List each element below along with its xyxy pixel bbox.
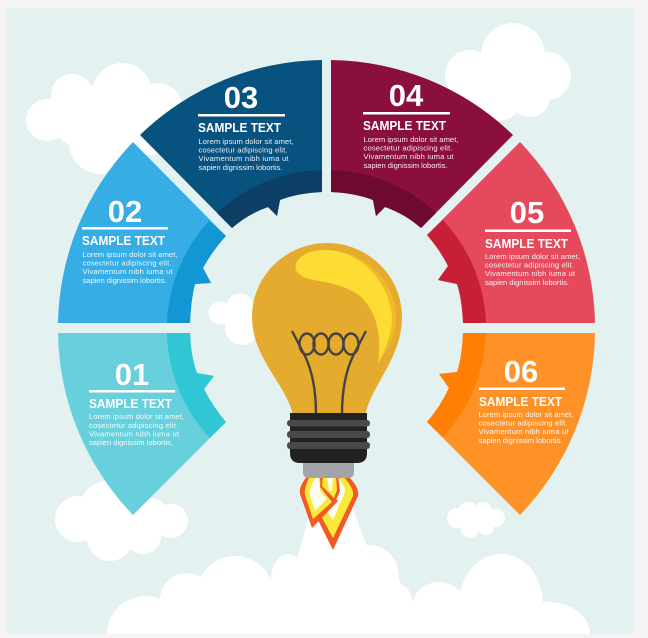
segment shape 04	[331, 60, 513, 228]
icon: rocket flames	[300, 476, 358, 550]
body text 03	[198, 137, 294, 172]
body text 01	[89, 412, 184, 447]
body text 03: sapien dignissim lobortis.	[198, 163, 282, 172]
inner band 04	[331, 170, 436, 228]
cloud: behind bulb	[208, 294, 262, 345]
cloud: bottom left	[55, 481, 188, 561]
number 05: 05	[510, 195, 544, 230]
inner band 03	[217, 170, 322, 228]
panel 01	[58, 333, 226, 515]
inner band 02	[167, 221, 226, 323]
body text 04: Vivamentum nibh iuma ut	[364, 152, 454, 161]
body text 06: Vivamentum nibh iuma ut	[478, 427, 569, 436]
inner band 06	[427, 333, 486, 437]
body text 01: Vivamentum nibh iuma ut	[89, 430, 180, 438]
segment shape 01	[58, 333, 226, 515]
body text 06	[478, 410, 574, 445]
body text 05: cosectetur adipiscing elit.	[485, 260, 574, 270]
heading 04: SAMPLE TEXT	[363, 118, 446, 133]
body text 04: cosectetur adipiscing elit.	[364, 144, 452, 152]
body text 02: sapien dignissim lobortis.	[82, 276, 166, 285]
body text 01: cosectetur adipiscing elit.	[89, 421, 178, 430]
screw base	[290, 413, 367, 463]
heading 03: SAMPLE TEXT	[198, 120, 281, 135]
segment shape 03	[140, 60, 322, 228]
body text 02: Vivamentum nibh iuma ut	[82, 267, 173, 276]
body text 04	[364, 135, 458, 170]
body text 01: Lorem ipsum dolor sit amet,	[89, 412, 184, 421]
body text 06: cosectetur adipiscing elit.	[478, 418, 568, 428]
heading 06: SAMPLE TEXT	[479, 394, 562, 409]
body text 03: cosectetur adipiscing elit.	[198, 146, 288, 154]
panel 04	[331, 60, 513, 228]
panel 06	[427, 333, 595, 515]
body text 06: sapien dignissim lobortis.	[478, 436, 562, 445]
body text 03: Vivamentum nibh iuma ut	[198, 154, 289, 163]
body text 05: sapien dignissim lobortis.	[485, 278, 569, 287]
body text 02: Lorem ipsum dolor sit amet,	[82, 250, 178, 259]
body text 04: Lorem ipsum dolor sit amet,	[364, 135, 458, 144]
bulb highlight	[295, 250, 396, 363]
cloud: top right	[445, 23, 571, 121]
number 02: 02	[108, 194, 142, 229]
number 06: 06	[504, 354, 538, 389]
body text 05	[485, 252, 580, 287]
body text 01: sapien dignissim lobortis.	[89, 438, 173, 447]
heading 02: SAMPLE TEXT	[82, 233, 165, 248]
panel 05	[427, 142, 595, 323]
panel 02	[58, 142, 226, 323]
body text 04: sapien dignissim lobortis.	[364, 161, 448, 170]
heading 05: SAMPLE TEXT	[485, 236, 568, 251]
grey cap	[303, 460, 354, 478]
body text 02	[82, 250, 178, 285]
cloud bank and rocket exhaust	[107, 502, 590, 634]
number 03: 03	[224, 80, 258, 115]
segment shape 05	[427, 142, 595, 323]
icon: light bulb	[252, 243, 402, 478]
cloud: bottom right small	[447, 502, 505, 538]
body text 03: Lorem ipsum dolor sit amet,	[198, 137, 294, 146]
body text 06: Lorem ipsum dolor sit amet,	[478, 410, 574, 419]
number 01: 01	[115, 357, 149, 392]
segment shape 06	[427, 333, 595, 515]
cloud: top left	[26, 63, 182, 174]
body text 05: Lorem ipsum dolor sit amet,	[485, 252, 580, 261]
body text 02: cosectetur adipiscing elit.	[82, 258, 172, 268]
bulb glass	[252, 243, 402, 415]
number 04: 04	[389, 78, 424, 113]
filament	[292, 331, 366, 414]
body text 05: Vivamentum nibh iuma ut	[485, 269, 576, 278]
panel 03	[140, 60, 322, 228]
segment shape 02	[58, 142, 226, 323]
heading 01: SAMPLE TEXT	[89, 396, 172, 411]
inner band 05	[427, 220, 486, 323]
inner band 01	[167, 333, 226, 438]
